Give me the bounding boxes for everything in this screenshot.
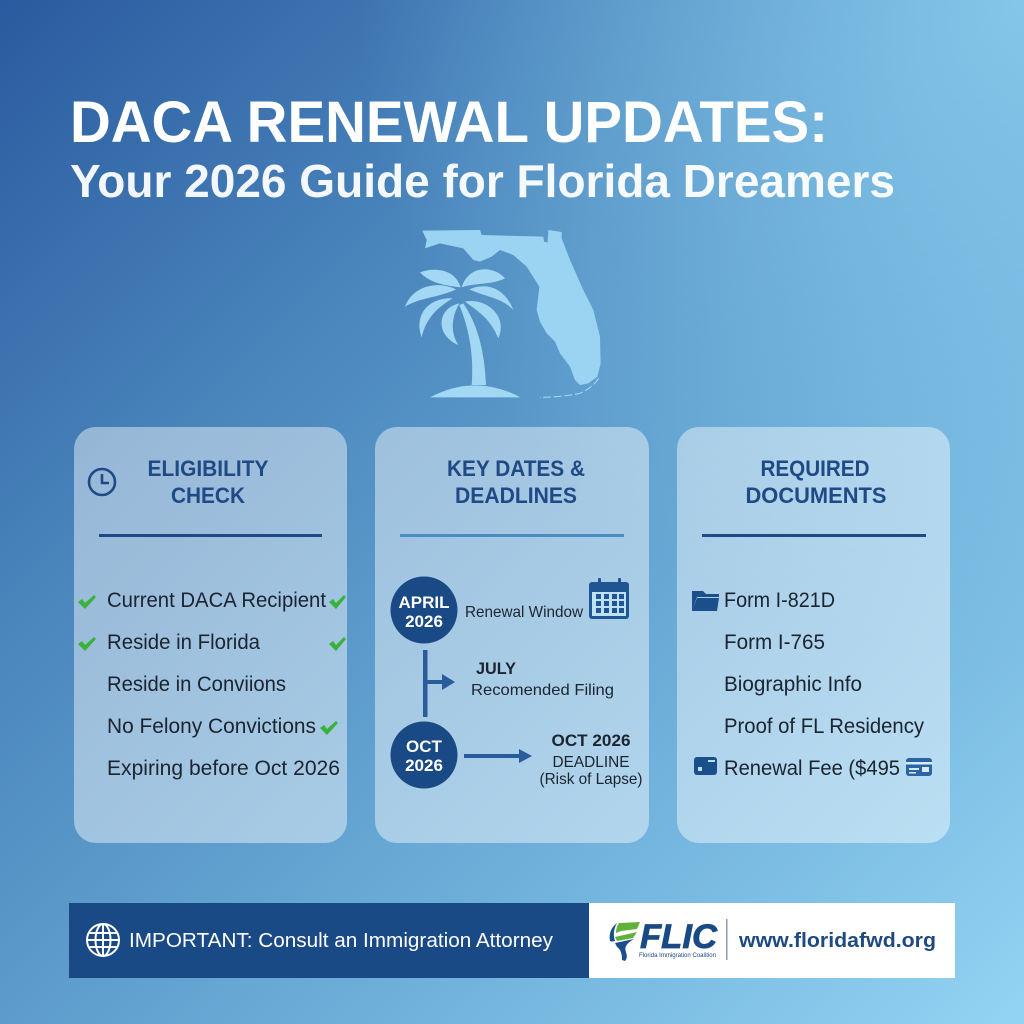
icon: Florida silhouette xyxy=(422,230,601,385)
label: Oct 2026 deadline: OCT 2026 xyxy=(552,731,630,750)
heading: required documents xyxy=(746,456,886,508)
label: Oct 2026 deadline xyxy=(540,731,642,788)
heading: required documents: DOCUMENTS xyxy=(746,483,886,508)
label: July recommended filing: JULY xyxy=(476,659,517,678)
notice text: IMPORTANT: Consult an Immigration Attorney xyxy=(129,930,553,952)
date circle: Oct 2026: 2026 xyxy=(405,756,443,775)
date circle: Oct 2026: OCT xyxy=(406,737,443,756)
icon: credit card xyxy=(906,758,932,776)
label: Oct 2026 deadline: (Risk of Lapse) xyxy=(540,771,642,788)
icon: folder xyxy=(692,591,719,611)
icon: Florida map and palm tree xyxy=(405,230,601,397)
heading: eligibility check: ELIGIBILITY xyxy=(148,456,269,481)
eligibility list xyxy=(107,589,340,780)
footer banner: important notice xyxy=(69,903,589,978)
title: DACA RENEWAL UPDATES: xyxy=(70,90,828,155)
eligibility list: Reside in Florida xyxy=(107,631,260,654)
eligibility list: No Felony Convictions xyxy=(107,715,316,738)
document list xyxy=(724,589,924,780)
icon: palm tree xyxy=(405,269,521,397)
label: Oct 2026 deadline: DEADLINE xyxy=(552,754,630,771)
date circle: April 2026: APRIL xyxy=(398,593,450,612)
panel: key dates and deadlines xyxy=(375,427,649,843)
panel: eligibility check xyxy=(74,427,347,843)
icon: globe xyxy=(87,924,119,956)
date circle: Oct 2026 xyxy=(390,722,458,788)
title: Your 2026 Guide for Florida Dreamers xyxy=(70,155,895,207)
panel: required documents xyxy=(677,427,950,843)
eligibility list: Current DACA Recipient xyxy=(107,589,326,612)
icon: check marks xyxy=(78,595,346,735)
label: July recommended filing xyxy=(471,659,614,699)
heading: key dates: DEADLINES xyxy=(455,483,577,508)
heading: key dates xyxy=(447,456,585,508)
eligibility list: Expiring before Oct 2026 xyxy=(107,757,340,780)
website url: www.floridafwd.org xyxy=(738,930,936,952)
heading: eligibility check xyxy=(148,456,269,508)
heading: key dates: KEY DATES & xyxy=(447,456,585,481)
arrow: to deadline xyxy=(464,749,532,763)
date circle: April 2026: 2026 xyxy=(405,612,443,631)
eligibility list: Reside in Conviions xyxy=(107,673,286,696)
logo: FLIC wordmark: Florida Immigration Coalition xyxy=(639,953,716,959)
document list: Biographic Info xyxy=(724,673,862,696)
heading: required documents: REQUIRED xyxy=(760,456,870,481)
logo mark: swirl xyxy=(610,922,640,961)
icon: calendar xyxy=(589,578,629,619)
arrow: timeline branch to July xyxy=(423,650,455,717)
footer: logo and website xyxy=(589,903,955,978)
logo: FLIC wordmark: FLIC xyxy=(640,918,717,956)
heading: eligibility check: CHECK xyxy=(171,483,245,508)
document list: Renewal Fee ($495 xyxy=(724,757,900,780)
title xyxy=(70,90,895,207)
document list: Proof of FL Residency xyxy=(724,715,924,738)
icon: clock xyxy=(89,469,115,495)
icon: Florida keys xyxy=(540,378,599,397)
label: renewal window: Renewal Window xyxy=(465,604,583,621)
document list: Form I-821D xyxy=(724,589,835,612)
label: July recommended filing: Recomended Filing xyxy=(471,682,614,699)
document list: Form I-765 xyxy=(724,631,825,654)
icon: wallet xyxy=(694,757,717,775)
date circle: April 2026 xyxy=(390,576,458,644)
